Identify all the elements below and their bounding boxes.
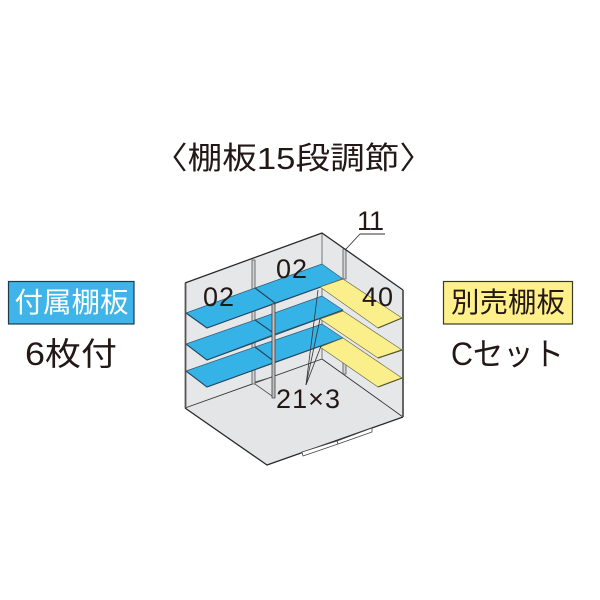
front post <box>272 304 275 398</box>
leader lines to 21×3 <box>306 290 321 385</box>
yellow shelves <box>320 279 402 387</box>
badge: included shelves: 付属棚板 <box>14 287 128 318</box>
label: C set: Cセット <box>451 336 564 372</box>
shelving diagram <box>185 233 403 465</box>
blue shelves <box>186 264 343 387</box>
badge: optional shelves <box>444 282 572 324</box>
label: six shelves included: 6枚付 <box>25 336 117 372</box>
wall outline <box>185 233 403 465</box>
wall posts <box>252 249 346 396</box>
dimension labels: 02 <box>203 282 234 312</box>
badge: optional shelves: 別売棚板 <box>451 287 565 318</box>
dimension labels: 21×3 <box>276 384 340 414</box>
yellow shelf front edges <box>378 318 402 387</box>
leader line to 11 <box>346 234 385 249</box>
badge: included shelves <box>8 282 134 324</box>
dimension labels: 02 <box>276 254 307 284</box>
dimension labels: 40 <box>362 282 393 312</box>
shelf front edges <box>186 279 343 387</box>
door threshold <box>302 428 372 456</box>
storage walls and floor <box>185 233 403 465</box>
title: 〈棚板15段調節〉 <box>153 141 434 176</box>
dimension labels: 11 <box>357 206 384 236</box>
dimension labels <box>203 206 393 414</box>
